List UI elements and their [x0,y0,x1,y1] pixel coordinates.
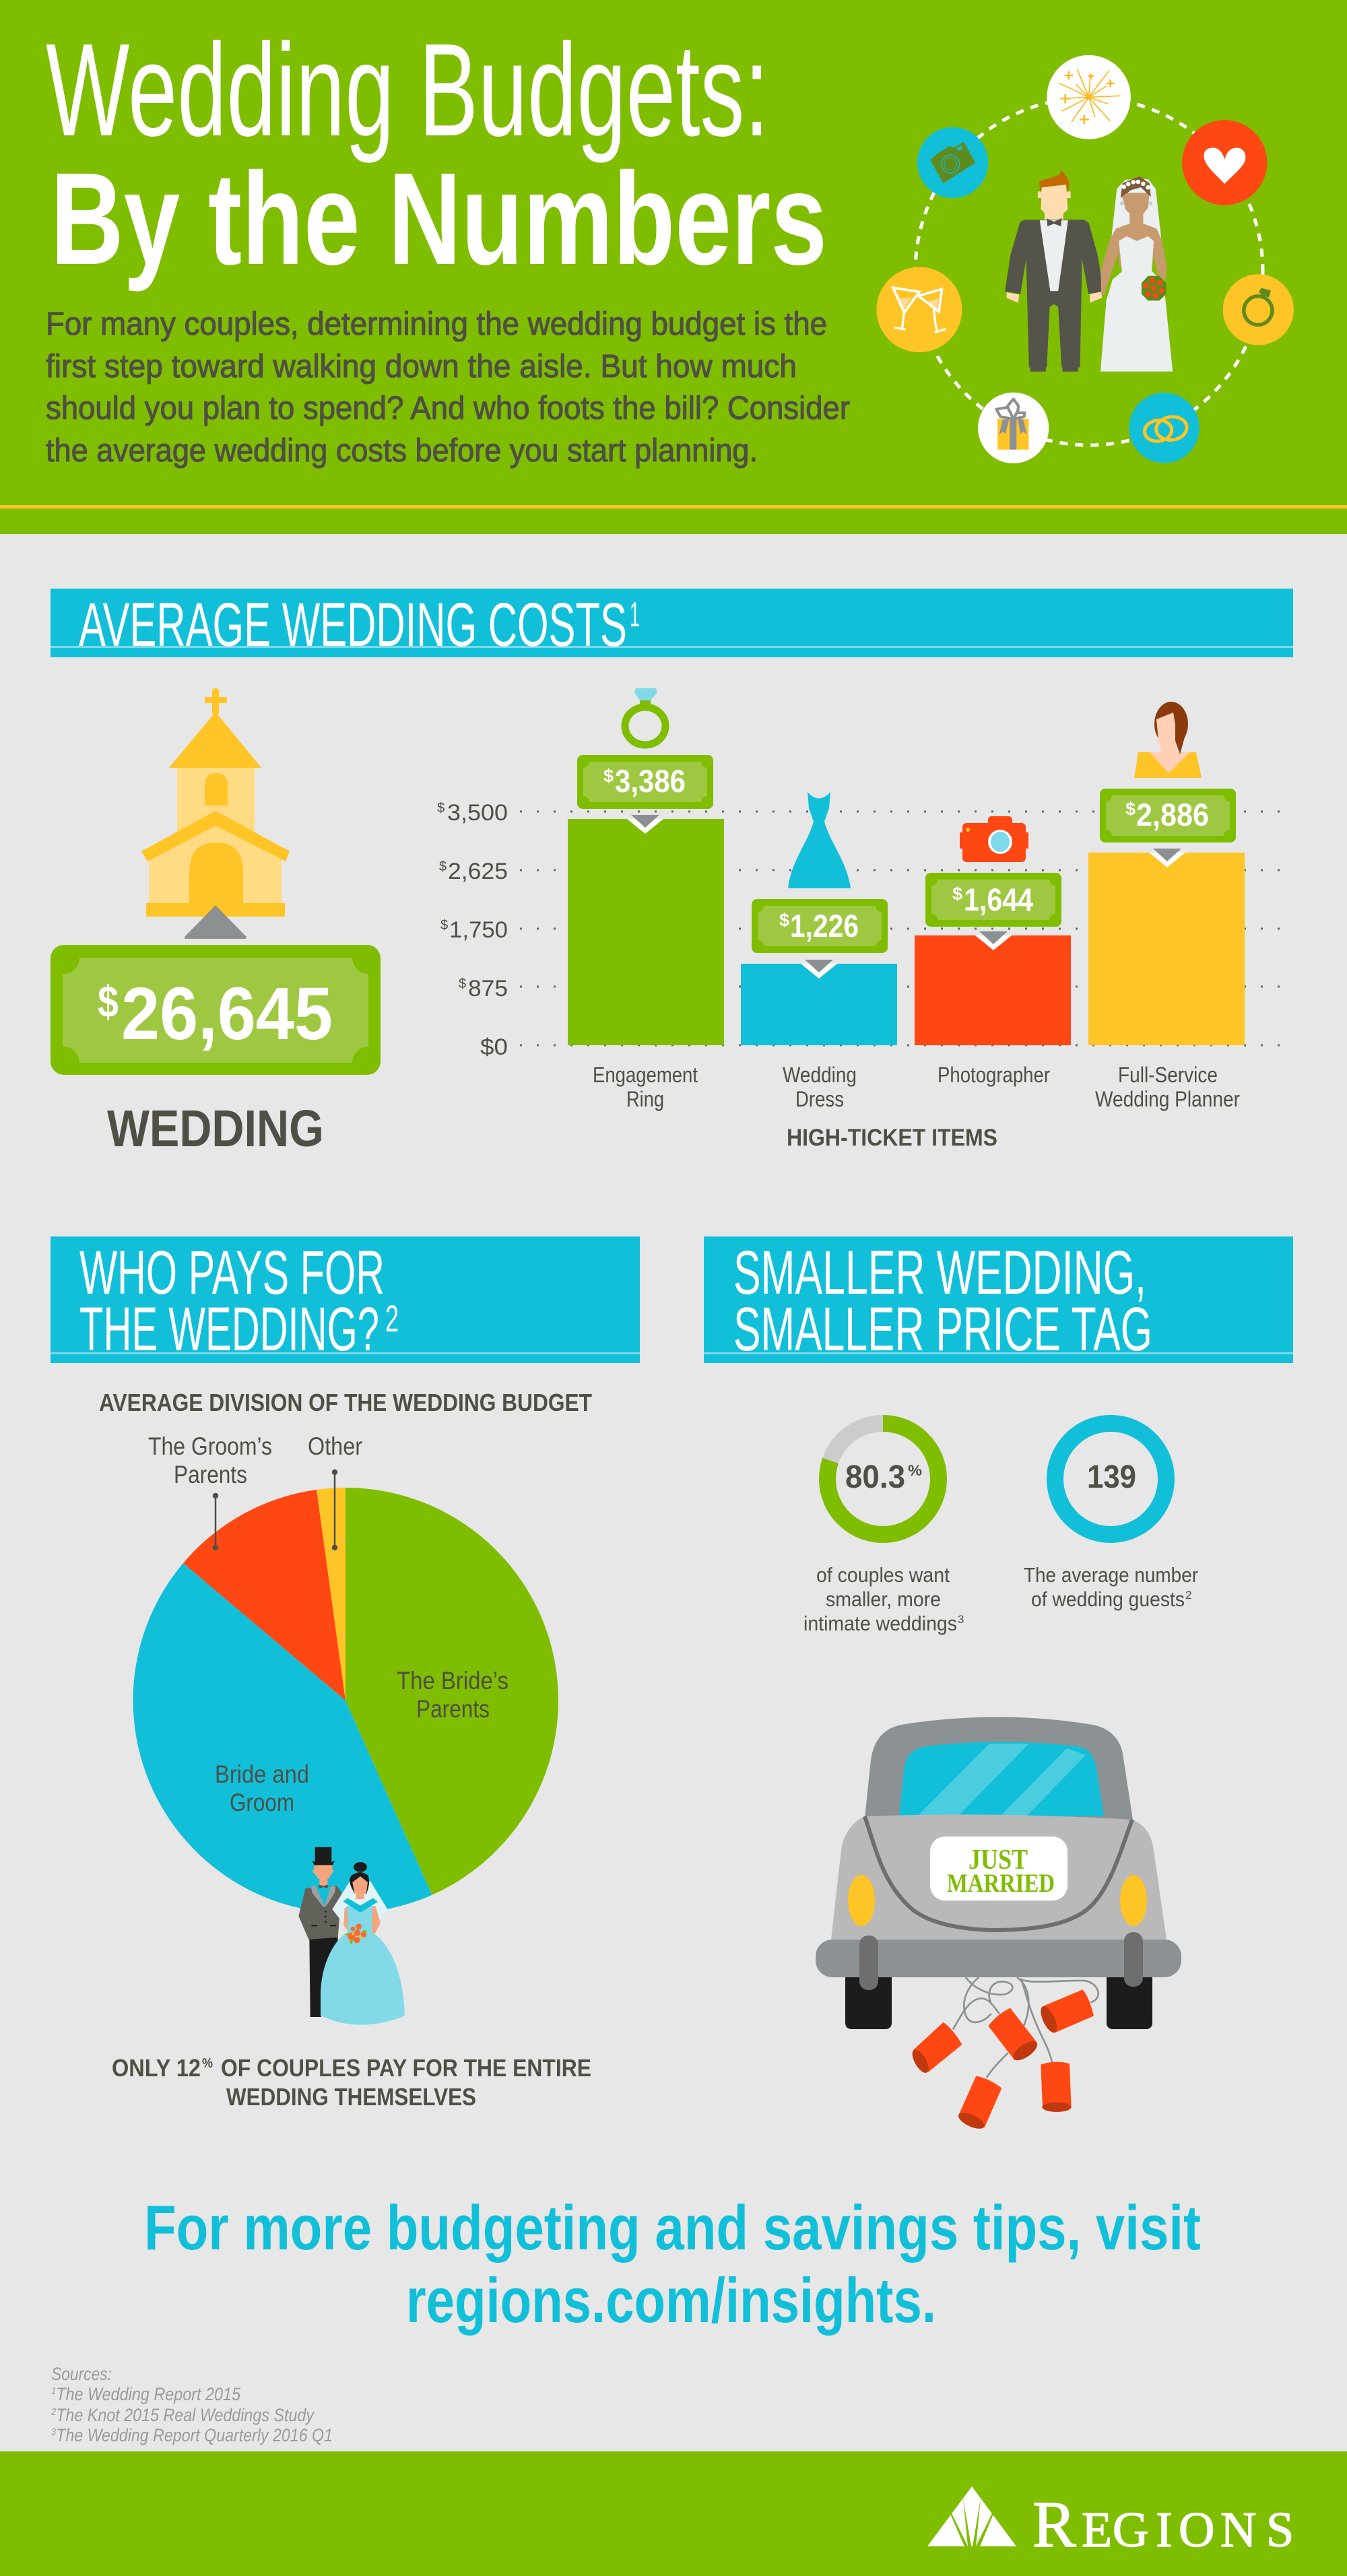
sources: Sources: [51,2364,112,2384]
stat caption: couples [803,1563,964,1635]
bar: wedding dress: 1,226 [790,908,859,944]
license plate: JUST [968,1845,1028,1876]
bar: engagement ring [568,755,724,1045]
logo: Regions: REGIONS [1032,2488,1294,2561]
logo: Regions [927,2486,1294,2561]
pie note: WEDDING THEMSELVES [226,2083,476,2111]
icon: fireworks [1047,55,1131,139]
section heading [51,1236,640,1364]
total bill: $ [98,977,119,1026]
icon: heart [1182,120,1267,205]
section heading [704,1236,1293,1364]
bar: wedding planner: $ [1125,799,1136,819]
donut: guests: 139 [1087,1459,1136,1495]
bride [1100,176,1173,372]
total bill [51,945,381,1075]
bar: engagement ring: $ [603,766,614,786]
icon: planner [1134,702,1202,778]
bride [321,1862,405,2025]
total bill: 26,645 [121,972,333,1055]
sources: The Wedding Report 2015 [56,2384,241,2404]
stat caption: couples: intimate weddings [803,1612,957,1635]
pie labels: Bride and [215,1760,309,1788]
license plate [930,1837,1067,1901]
stat caption: couples: smaller, more [826,1587,941,1611]
stat caption: couples: of couples want [816,1563,950,1587]
intro text: should you plan to spend? And who foots the bill? Consider [46,391,850,426]
sources: 2 [51,2406,57,2418]
panel: average wedding costs [51,589,1293,1158]
donut: 80.3 percent: % [908,1462,922,1479]
title: By the Numbers [51,145,827,292]
stat caption: guests: The average number [1024,1563,1198,1587]
icon: wedding bands [1129,393,1200,463]
call to action [144,2192,1201,2336]
illustration: tin cans [909,1977,1098,2132]
pie labels: The Groom’s [148,1432,272,1460]
donut: 80.3 percent: 80.3 [845,1459,905,1495]
x axis labels: Ring [626,1087,664,1111]
icon: engagement ring [625,688,665,745]
icon: champagne glasses [876,267,962,352]
axis labels: 2,625 [448,859,508,884]
leader lines [213,1470,337,1550]
subheading: AVERAGE DIVISION OF THE WEDDING BUDGET [99,1389,592,1416]
bar: wedding planner: 2,886 [1136,797,1209,832]
license plate: MARRIED [947,1869,1055,1898]
panel: footer [0,2451,1347,2576]
x axis title: HIGH-TICKET ITEMS [787,1125,997,1151]
stat caption: guests: 2 [1185,1589,1191,1601]
pie labels: Parents [416,1695,490,1723]
section heading: 2 [385,1297,399,1340]
icon: camera [917,127,988,198]
sources: 1 [51,2385,56,2397]
illustration: couple paying [298,1847,405,2025]
title [46,16,827,292]
axis labels: $ [440,918,448,933]
pie note: OF COUPLES PAY FOR THE ENTIRE [221,2054,591,2082]
stat caption: couples: 3 [958,1613,964,1626]
section heading: AVERAGE WEDDING COSTS [79,591,627,659]
sources: The Knot 2015 Real Weddings Study [56,2405,315,2425]
x axis labels [593,1063,1240,1111]
bar: wedding dress [741,899,897,1045]
x axis labels: Dress [795,1087,844,1111]
pie labels: The Bride’s [397,1667,508,1694]
icon: gift [978,393,1049,463]
axis labels: $ [437,801,445,816]
axis labels: $0 [480,1034,508,1060]
x axis labels: Wedding [783,1063,857,1087]
axis labels: 3,500 [447,800,508,826]
icon: church [141,688,290,937]
pie labels: Other [308,1432,362,1460]
illustration: couple and icons [876,55,1294,463]
x axis labels: Engagement [593,1063,698,1087]
intro text: first step toward walking down the aisle. But how much [46,349,797,385]
intro text: the average wedding costs before you start planning. [46,433,758,469]
bar: wedding dress: $ [779,910,789,930]
axis labels: $ [439,859,447,874]
x axis labels: Photographer [938,1063,1050,1087]
section heading: 1 [630,595,640,634]
pie chart [133,1432,558,1913]
pie labels [148,1432,508,1816]
x axis labels: Wedding Planner [1095,1087,1240,1111]
stat caption: guests [1024,1563,1198,1611]
groom [298,1847,341,2017]
section heading: WHO PAYS FOR [79,1239,385,1307]
pie note: % [202,2056,213,2071]
pie labels: Parents [174,1461,247,1488]
stat caption: guests: of wedding guests [1031,1587,1185,1611]
section heading: SMALLER WEDDING, [733,1239,1146,1307]
intro text [46,306,850,469]
donut: guests [1055,1424,1167,1534]
dashed ring [915,98,1263,445]
groom [1005,170,1104,372]
bar: wedding planner [1088,789,1245,1045]
bar chart [437,688,1280,1151]
icon: ring [1223,274,1294,345]
pie note: ONLY 12 [112,2054,201,2082]
axis labels [437,800,508,1060]
section heading: THE WEDDING? [79,1295,379,1364]
icon: dress [788,792,851,888]
panel: header [0,0,1347,534]
pie labels: Groom [230,1789,294,1816]
sources [51,2364,333,2445]
intro text: For many couples, determining the wedding budget is the [46,306,827,342]
title: Wedding Budgets: [46,16,769,164]
call to action: regions.com/insights. [406,2265,936,2336]
bar: engagement ring: 3,386 [615,763,686,799]
panel: smaller wedding [704,1236,1293,2132]
x axis labels: Full-Service [1118,1063,1218,1087]
bar: photographer: 1,644 [964,882,1033,917]
sources: 3 [51,2426,57,2438]
bar: photographer: $ [952,884,962,904]
axis labels: $ [459,977,466,991]
axis labels: 875 [468,976,508,1001]
bar: photographer [915,873,1071,1045]
section heading [51,589,1293,659]
illustration: car [816,1717,1181,2029]
axis labels: 1,750 [449,917,508,943]
donut: 80.3 percent [827,1424,939,1534]
pie note [112,2054,591,2111]
total label: WEDDING [107,1100,324,1158]
sources: The Wedding Report Quarterly 2016 Q1 [56,2425,333,2445]
axis gridlines [520,812,1280,1045]
panel: who pays [51,1236,640,2111]
icon: photo camera [960,816,1028,862]
